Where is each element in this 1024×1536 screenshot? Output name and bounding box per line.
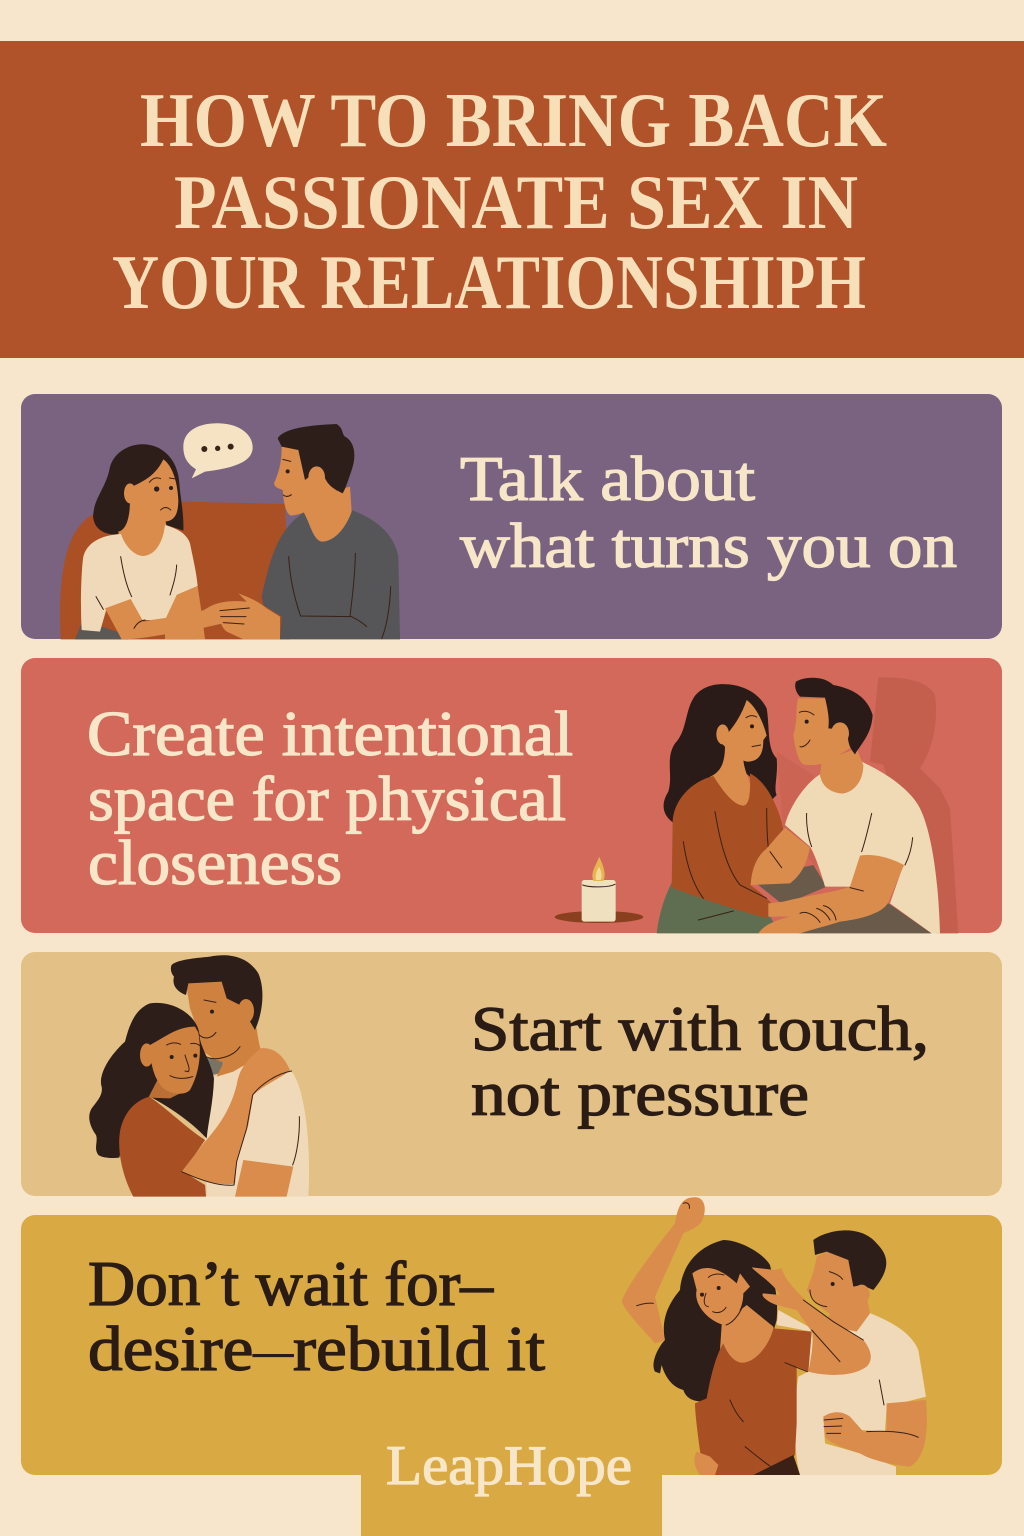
text: create intentional space xyxy=(87,699,573,898)
title banner: HOW TO BRING BACK xyxy=(140,77,887,163)
illustration: couple embracing by a candle xyxy=(555,677,958,933)
title banner: PASSIONATE SEX IN xyxy=(174,159,858,245)
text: start with touch: not pressure xyxy=(471,1059,809,1129)
panel: talk about what turns you on xyxy=(21,394,1002,639)
panel: create intentional space xyxy=(21,658,1002,933)
panel: don't wait for desire xyxy=(21,1197,1002,1536)
title banner: YOUR RELATIONSHIPH xyxy=(112,239,866,325)
title banner xyxy=(0,41,1024,358)
illustration: couple hugging xyxy=(89,955,309,1197)
text: create intentional space: space for physical xyxy=(88,764,566,834)
text: don't wait for desire: rebuild it xyxy=(293,1314,546,1384)
text: don't wait for desire: — xyxy=(252,1332,294,1372)
illustration: couple talking on sofa xyxy=(60,423,400,639)
text: create intentional space: Create intentional xyxy=(87,699,573,769)
text: talk about: what turns you on xyxy=(460,511,957,581)
illustration: couple playfully dancing xyxy=(622,1197,927,1475)
text: start with touch xyxy=(471,994,929,1129)
text: don't wait for desire: Don’t wait for– xyxy=(88,1249,494,1319)
text: don't wait for desire xyxy=(88,1249,546,1384)
text: talk about xyxy=(460,444,957,581)
text: talk about: Talk about xyxy=(460,444,756,514)
text: don't wait for desire: desire xyxy=(88,1314,238,1384)
text: start with touch: Start with touch, xyxy=(471,994,929,1064)
text: create intentional space: closeness xyxy=(88,828,342,898)
panel: start with touch xyxy=(21,952,1002,1197)
logo: LeapHope: LeapHope xyxy=(386,1435,632,1497)
